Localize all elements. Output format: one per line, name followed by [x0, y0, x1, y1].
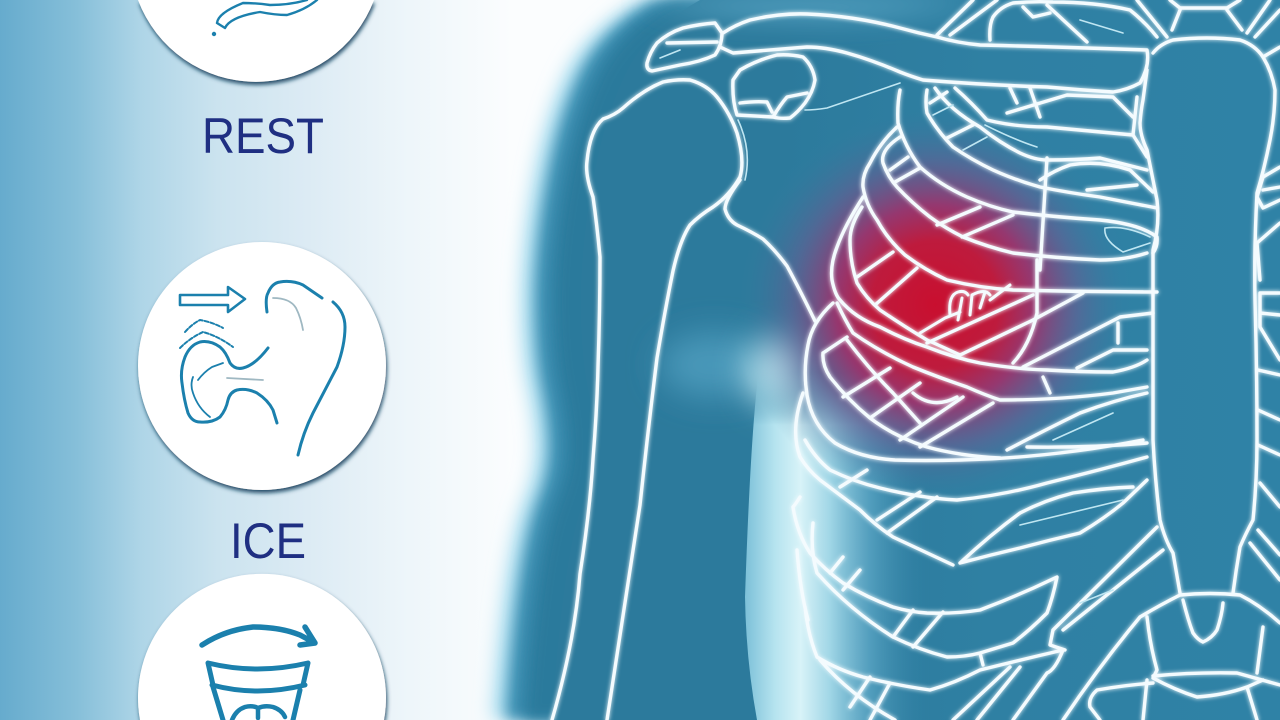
panel: Rest step [138, 0, 374, 164]
panel: compression step [138, 574, 386, 720]
icon: rest circle [138, 0, 374, 82]
body silhouette [492, 0, 1280, 720]
scapula edge [725, 180, 815, 321]
coracoid [733, 55, 815, 118]
middle ribs [805, 303, 1147, 460]
injury glow [735, 105, 1135, 505]
fracture mark [920, 285, 1010, 333]
fine pale detail lines [660, 20, 1150, 603]
lower ribs [793, 393, 1163, 720]
icon: cup circle [138, 574, 386, 720]
label: ICE: ICE [230, 513, 306, 569]
top highlight [640, 0, 980, 15]
injured ribs [832, 197, 1153, 372]
upper ribs [863, 88, 1157, 292]
xiphoid and lower structures [1063, 483, 1280, 720]
panel: Ice step [138, 242, 386, 569]
rib side light [745, 382, 902, 720]
sternum [1140, 38, 1275, 593]
clavicle [720, 14, 1148, 92]
underarm glow [748, 336, 808, 408]
humerus [552, 80, 742, 720]
top and right rib fragments [937, 0, 1280, 455]
skeleton line art [552, 0, 1280, 720]
icon: ice circle [138, 242, 386, 490]
arm soft band [660, 333, 770, 397]
clavicle end piece [647, 23, 722, 71]
label: REST: REST [202, 108, 324, 164]
